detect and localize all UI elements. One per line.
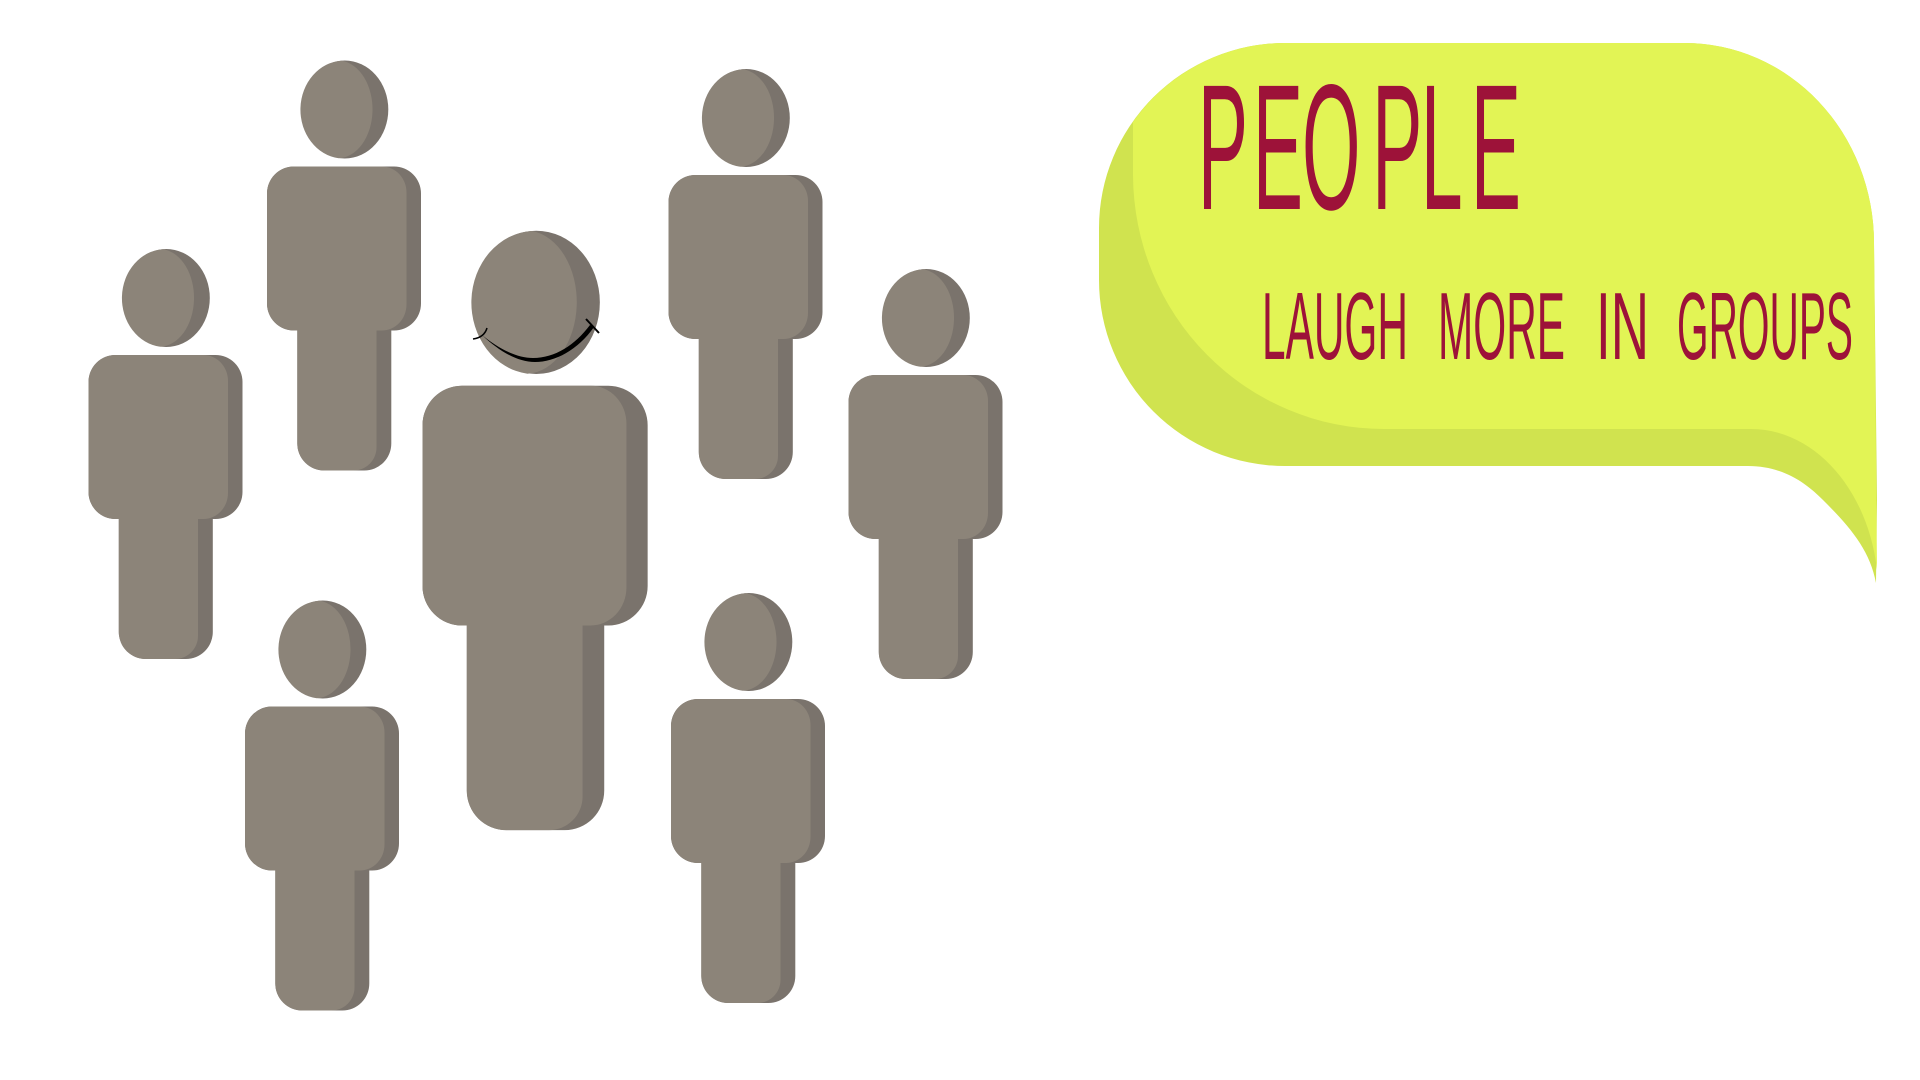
subheading: LAUGH MORE IN GROUPS [1262, 273, 1853, 380]
person: top left [267, 60, 421, 470]
speech bubble [1099, 43, 1877, 583]
person: far right [848, 269, 1002, 679]
word: IN: IN [1596, 273, 1649, 380]
subheading: LAUGH MORE IN GROUPS: MORE [1438, 273, 1565, 380]
person: bottom left [245, 600, 399, 1010]
person: top right [668, 69, 822, 479]
person: far left [88, 249, 242, 659]
icon: smile on centre figure [473, 319, 599, 362]
heading: PEOPLE: PEOPLE [1198, 49, 1521, 248]
subheading: LAUGH MORE IN GROUPS: LAUGH [1262, 273, 1408, 380]
person: bottom right [671, 593, 825, 1003]
person: large centre figure [422, 231, 648, 830]
